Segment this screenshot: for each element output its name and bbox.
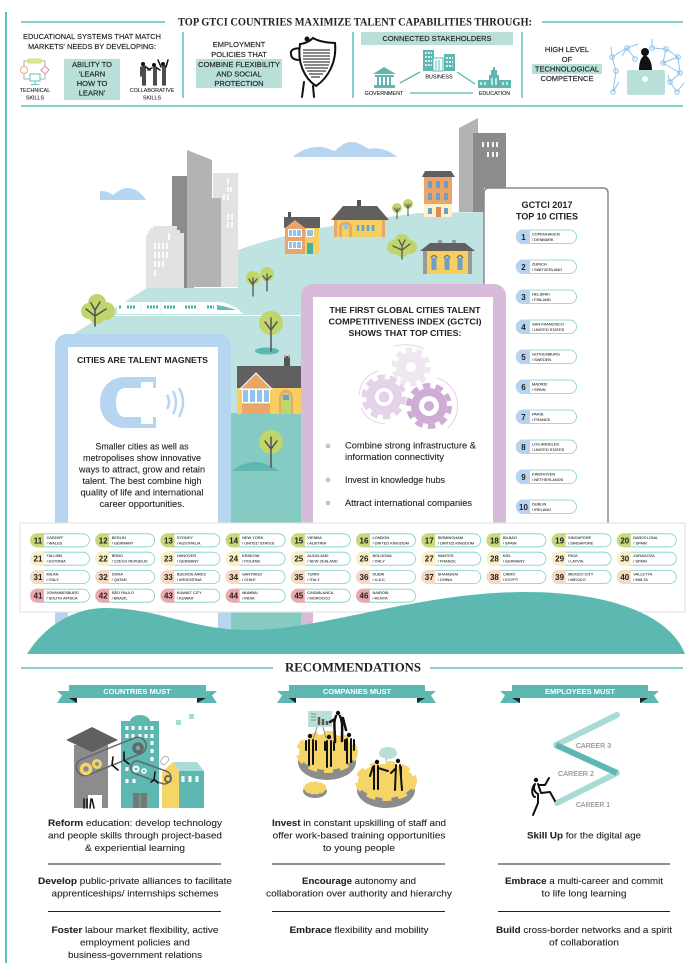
icon: business: BUSINESS [425, 74, 453, 80]
heading: educational systems: MARKETS' NEEDS BY DEVELOPING: [28, 42, 156, 51]
heading: GCTCI shows: SHOWS THAT TOP CITIES: [348, 328, 462, 338]
figures at door [84, 799, 94, 808]
pill: Copenhagen: COPENHAGEN [532, 232, 560, 236]
row: cities 31-40: 31 [34, 573, 43, 582]
row: cities 11-20: BERLIN [112, 535, 126, 540]
text column: companies [266, 818, 452, 936]
row: cities 31-40: / ARGENTINA [177, 577, 202, 582]
pill: Dublin [516, 500, 576, 514]
row: cities 41-46: JOHANNESBURG [46, 590, 79, 595]
box: ability to learn how to learn: 'LEARN [79, 70, 105, 78]
row: cities 31-40: VALLETTA [633, 572, 653, 576]
row: cities 31-40: TURIN [307, 572, 319, 576]
row: cities 31-40: 34 [229, 573, 239, 582]
panel: employment policies: EMPLOYMENT [213, 40, 266, 49]
row: cities 31-40: 32 [99, 573, 108, 582]
bullets list: Invest in knowledge hubs [345, 475, 445, 486]
tree: large upper [387, 234, 417, 259]
row: cities 21-30: / LATVIA [568, 559, 584, 564]
pill: San Francisco: / UNITED STATES [532, 327, 565, 332]
row: cities 31-40: 35 [294, 573, 304, 582]
row: cities 41-46: 44 [229, 592, 239, 601]
row: cities 21-30: NANTES [438, 553, 454, 558]
row: cities 21-30: BOLOGNA [372, 553, 392, 558]
text column: countries: & experiential learning [85, 843, 185, 854]
text column: countries: employment policies and [80, 938, 190, 948]
pill: Eindhoven [516, 470, 576, 484]
row: cities 11-20: 13 [164, 536, 173, 545]
pill: Los Angeles: 8 [521, 443, 526, 452]
row: cities 21-30: / GERMANY [177, 559, 199, 564]
icon: government [365, 67, 404, 97]
row: cities 31-40: DOHA [112, 572, 123, 576]
pill: Gothenburg: / SWEDEN [532, 357, 551, 362]
pill: Helsinki [516, 290, 576, 304]
text: talent magnets body: quality of life and international [80, 488, 204, 498]
label: career 1: CAREER 1 [576, 802, 610, 809]
row: cities 21-30: 30 [620, 555, 630, 564]
label: technical skills: TECHNICAL [20, 88, 50, 94]
illustration: companies [298, 711, 415, 808]
text column: employees: Build cross-border networks and a spirit [496, 925, 672, 936]
row: cities 11-20: / UNITED KINGDOM [372, 540, 409, 545]
figure: climbing person [532, 778, 555, 815]
people on gear [306, 711, 354, 767]
row: cities 21-30: 27 [425, 555, 434, 564]
cloud: top [293, 142, 397, 157]
row: cities 41-46: / MOROCCO [307, 596, 330, 601]
row: cities 31-40: MILAN [46, 572, 59, 576]
label: technical skills: SKILLS [26, 96, 45, 102]
row: cities 21-30: RIGA [568, 553, 578, 558]
train [117, 302, 243, 314]
pill: Gothenburg: 5 [521, 353, 526, 362]
pill: Helsinki: / FINLAND [532, 297, 551, 302]
speech bubble [379, 747, 397, 762]
text: talent magnets body: Smaller cities as well as [96, 442, 189, 452]
row: cities 11-20: 16 [360, 536, 369, 545]
pill: Helsinki: 3 [521, 293, 526, 302]
icon: collaborative people [141, 60, 168, 85]
icon: shield [291, 36, 335, 97]
row: cities 41-46: / KUWAIT [177, 596, 195, 601]
buildings: city cluster [146, 150, 238, 288]
label: career 3: CAREER 3 [576, 743, 611, 750]
row: cities 11-20: / SINGAPORE [568, 540, 594, 545]
presentation board [308, 711, 332, 740]
pill: San Francisco [516, 320, 576, 334]
panel: employment policies: COMBINE FLEXIBILITY [198, 60, 280, 69]
pill: Zurich [516, 260, 576, 274]
text column: countries: Reform education: develop technology [48, 818, 222, 829]
pill: Eindhoven: EINDHOVEN [532, 472, 555, 476]
pill: Los Angeles [516, 440, 576, 454]
conveyor belt lower [129, 755, 173, 786]
row: cities 11-20: 11 [34, 536, 43, 545]
row: cities 41-46: MUMBAI [242, 590, 258, 595]
pill: Copenhagen [516, 230, 576, 244]
label: career 2: CAREER 2 [558, 771, 594, 778]
pill: Dublin: 10 [519, 503, 528, 512]
banner: employees must [500, 685, 659, 703]
pill: Paris: / FRANCE [532, 417, 551, 422]
heading: top 10 cities [516, 200, 578, 222]
row: cities 11-20: 19 [555, 536, 565, 545]
row: cities 31-40: 40 [620, 573, 630, 582]
pill: San Francisco: SAN FRANCISCO [532, 322, 564, 326]
row: cities 21-30: TALLINN [46, 553, 62, 558]
text column: companies: offer work-based training opportunities [272, 830, 446, 842]
panel: technological competence: COMPETENCE [541, 74, 593, 83]
row: cities 11-20: / SPAIN [633, 540, 647, 545]
row: cities 11-20: LONDON [372, 535, 389, 540]
pill: Los Angeles: / UNITED STATES [532, 447, 565, 452]
panel: first global cities talent index [301, 284, 506, 634]
title: TOP GTCI COUNTRIES MAXIMIZE TALENT CAPABILITIES THROUGH: [178, 14, 532, 28]
row: cities 11-20: SYDNEY [177, 535, 193, 540]
box: ability to learn how to learn: LEARN' [79, 88, 106, 98]
pill: Paris [516, 410, 576, 424]
panel: top 10 cities [484, 188, 608, 530]
row: cities 11-20: / WALES [46, 540, 63, 545]
icon: government: GOVERNMENT [365, 91, 404, 97]
row: cities 21-30: / FRANCE [438, 559, 456, 564]
row: cities 11-20: 18 [490, 536, 499, 545]
row: cities 31-40: SANTIAGO [242, 572, 262, 576]
row: cities 41-46: CASABLANCA [307, 590, 334, 595]
row: cities 41-46: / SOUTH AFRICA [46, 596, 78, 601]
row: cities 11-20: BARCELONA [633, 535, 658, 540]
label: technical skills [20, 88, 50, 102]
label: collaborative skills: COLLABORATIVE [130, 88, 175, 94]
pill: Gothenburg: GOTHENBURG [532, 352, 560, 356]
row: cities 11-20 [30, 533, 676, 547]
panel: employment policies: POLICIES THAT [211, 50, 267, 59]
text column: companies: Invest in constant upskilling of staff and [272, 818, 446, 829]
pill: Gothenburg [516, 350, 576, 364]
pill: Eindhoven: / NETHERLANDS [532, 477, 564, 482]
row: cities 31-40: / MEXICO [568, 577, 586, 582]
heading: top 10 cities: TOP 10 CITIES [516, 212, 578, 222]
row: cities 21-30: 22 [99, 555, 108, 564]
heading: recommendations: RECOMMENDATIONS [285, 660, 421, 674]
icon: technical skills [20, 59, 49, 84]
row: cities 31-40: 38 [490, 573, 499, 582]
row: cities 31-40: / CHILE [242, 577, 256, 582]
tree: with mound [255, 311, 283, 354]
row: cities 31-40: SHANGHAI [438, 572, 458, 576]
gear platform large [298, 733, 356, 780]
pill: Zurich: / SWITZERLAND [532, 267, 562, 272]
row: cities 31-40: 36 [360, 573, 369, 582]
box: ability to learn how to learn [64, 59, 120, 100]
row: cities 11-20: BILBAO [503, 535, 517, 540]
text column: companies: to young people [323, 843, 395, 854]
row: cities 41-46: 42 [99, 592, 108, 601]
row: cities 21-30: KIEL [503, 553, 512, 558]
pill: Copenhagen: / DENMARK [532, 237, 554, 242]
row: cities 21-30: 29 [555, 555, 565, 564]
row: cities 21-30: 24 [229, 555, 239, 564]
row: cities 31-40: / CHINA [438, 577, 452, 582]
conveyor belt upper [74, 735, 149, 778]
panel: cities are talent magnets [55, 334, 231, 634]
row: cities 11-20: / UNITED STATES [242, 540, 275, 545]
row: cities 21-30 [30, 552, 676, 566]
text column: countries: Foster labour market flexibility, active [52, 925, 218, 936]
pill: Paris: 7 [521, 413, 526, 422]
row: cities 11-20: 15 [294, 536, 304, 545]
gear platform small [303, 782, 327, 798]
row: cities 31-40: 33 [164, 573, 173, 582]
panel: connected stakeholders [361, 32, 513, 97]
bullets list [326, 440, 477, 509]
row: cities 21-30: 28 [490, 555, 499, 564]
row: cities 11-20: CARDIFF [46, 535, 64, 540]
heading: GCTCI shows [328, 305, 482, 338]
text column: employees: to life long learning [542, 888, 626, 900]
row: cities 21-30: ZARAGOZA [633, 553, 655, 558]
icon: education: EDUCATION [479, 91, 510, 97]
row: cities 31-40: CAIRO [503, 572, 515, 576]
row: cities 41-46: KUWAIT CITY [177, 590, 202, 595]
building: top right tower [459, 118, 506, 212]
pill: Copenhagen: 1 [521, 233, 526, 242]
pill: Paris: PARIS [532, 412, 544, 416]
house: low yellow [420, 240, 475, 274]
heading: GCTCI shows: COMPETITIVENESS INDEX (GCTCI) [328, 316, 482, 326]
row: cities 31-40 [30, 570, 676, 584]
text column: countries: and people skills through project-based [48, 830, 222, 842]
gear platform right [357, 763, 415, 808]
cloud: left [100, 188, 146, 200]
row: cities 21-30: / SPAIN [633, 559, 647, 564]
row: cities 31-40: DUBAI [372, 572, 384, 576]
icon: technology network [610, 39, 684, 95]
house: cottage [237, 355, 301, 414]
row: cities 41-46: 46 [360, 592, 369, 601]
row: cities 11-20: NEW YORK [242, 535, 264, 540]
row: cities 41-46: 43 [164, 592, 173, 601]
row: cities 21-30: KRAKOW [242, 553, 260, 558]
house: tall townhouse [422, 171, 455, 217]
text column: countries: apprenticeships/ internships schemes [52, 888, 219, 900]
house: red gable [284, 212, 320, 254]
row: cities 21-30: / POLAND [242, 559, 260, 564]
row: cities 31-40: / EGYPT [503, 577, 519, 582]
text column: employees: Skill Up for the digital age [527, 830, 641, 842]
text column: employees: of collaboration [549, 938, 619, 948]
text column: employees: Embrace a multi-career and commit [505, 876, 663, 887]
row: cities 41-46: / BRAZIL [112, 596, 128, 601]
row: cities 21-30: / NEW ZEALAND [307, 559, 338, 564]
icon: education [478, 67, 511, 97]
heading: connected stakeholders: CONNECTED STAKEHOLDERS [382, 34, 492, 43]
pill: Madrid: / SPAIN [532, 387, 546, 392]
row: cities 11-20: / SPAIN [503, 540, 517, 545]
row: cities 31-40: / MALTA [633, 577, 648, 582]
text: talent magnets body [78, 442, 205, 510]
text column: countries: business-government relations [68, 950, 202, 961]
row: cities 21-30: AUCKLAND [307, 553, 329, 558]
panel: employment policies [196, 40, 282, 88]
row: cities 21-30: / GERMANY [503, 559, 525, 564]
row: cities 21-30: / CZECH REPUBLIC [112, 559, 148, 564]
people shaking hands [370, 759, 402, 790]
heading: talent magnets: CITIES ARE TALENT MAGNETS [77, 355, 208, 365]
cityscape [75, 118, 506, 640]
panel: employment policies: PROTECTION [214, 79, 264, 88]
text column: companies: Encourage autonomy and [302, 876, 416, 887]
row: cities 11-20: 17 [425, 536, 434, 545]
row: cities 11-20: / AUSTRIA [307, 540, 327, 545]
row: cities 21-30: / ITALY [372, 559, 385, 564]
row: cities 21-30: HANOVER [177, 553, 196, 558]
row: cities 31-40: MEXICO CITY [568, 572, 594, 576]
row: cities 11-20: / AUSTRALIA [177, 540, 201, 545]
tree: pair upper [392, 199, 413, 219]
pill: Dublin: / IRELAND [532, 507, 551, 512]
lower teal block [231, 413, 301, 638]
tree: large left [81, 294, 115, 326]
row: cities 31-40: 37 [425, 573, 434, 582]
heading: connected stakeholders [361, 32, 513, 45]
house: long yellow [331, 200, 389, 237]
panel: technological competence: TECHNOLOGICAL [535, 64, 599, 74]
pill: Zurich: ZURICH [532, 262, 547, 266]
pill: San Francisco: 4 [521, 323, 526, 332]
row: cities 31-40: BUENOS AIRES [177, 572, 206, 576]
row: cities 11-20: SINGAPORE [568, 535, 592, 540]
bullets list: Attract international companies [345, 498, 472, 509]
row: cities 11-20: VIENNA [307, 535, 322, 540]
lower hill [27, 592, 685, 654]
row: cities 41-46: 45 [294, 592, 304, 601]
row: cities 11-20: 20 [620, 536, 630, 545]
box: ability to learn how to learn: HOW TO [77, 79, 107, 88]
tree: lower with mound [232, 430, 283, 471]
row: cities 41-46: / INDIA [242, 596, 255, 601]
row: cities 31-40: 39 [555, 573, 565, 582]
pill: Los Angeles: LOS ANGELES [532, 442, 559, 446]
row: cities 41-46: 41 [34, 592, 43, 601]
heading: educational systems: EDUCATIONAL SYSTEMS THAT MATCH [23, 32, 161, 41]
row: cities 31-40: / ITALY [307, 577, 320, 582]
heading: top 10 cities: GCTCI 2017 [522, 200, 572, 210]
bullets list: Combine strong infrastructure & [345, 440, 477, 452]
row: cities 31-40: / U.A.E. [372, 577, 386, 582]
label: collaborative skills: SKILLS [143, 96, 162, 102]
text column: employees [496, 830, 672, 948]
text column: countries: Develop public-private alliances to facilitate [38, 876, 232, 887]
pill: Eindhoven: 9 [521, 473, 526, 482]
row: cities 41-46: / KENYA [372, 596, 388, 601]
row: cities 11-20: / UNITED KINGDOM [438, 540, 474, 545]
row: cities 21-30: 26 [360, 555, 369, 564]
text: talent magnets body: career opportunities. [100, 499, 184, 510]
panel: technological competence: HIGH LEVEL [545, 45, 589, 54]
row: cities 41-46 [30, 589, 416, 603]
icon: business [423, 50, 455, 80]
banner: countries must [57, 685, 217, 703]
text: talent magnets body: ways to attract, grow and retain [78, 464, 205, 476]
tree: pair center [246, 267, 274, 296]
banner: countries must: COUNTRIES MUST [103, 687, 171, 696]
illustration: countries [66, 714, 204, 808]
panel: cities 11 to 46 [20, 523, 685, 612]
text: talent magnets body: talent. The best combine high [82, 476, 202, 487]
row: cities 31-40: / ITALY [46, 577, 59, 582]
row: cities 11-20: 14 [229, 536, 239, 545]
illustration: career zigzag [532, 715, 617, 815]
icon: gears [359, 345, 458, 428]
panel: educational systems [20, 32, 175, 102]
panel: employment policies: AND SOCIAL [216, 70, 262, 78]
pill: Madrid: MADRID [532, 382, 548, 386]
banner: employees must: EMPLOYEES MUST [545, 687, 615, 696]
text column: companies: Embrace flexibility and mobility [290, 925, 429, 936]
pill: Madrid: 6 [521, 383, 526, 392]
row: cities 21-30: / ESTONIA [46, 559, 66, 564]
row: cities 11-20: 12 [99, 536, 108, 545]
row: cities 31-40: / QATAR [112, 577, 127, 582]
hill [75, 212, 484, 640]
text: talent magnets body: metropolises show innovative [83, 453, 201, 464]
box: ability to learn how to learn: ABILITY TO [72, 60, 112, 69]
row: cities 21-30: BRNO [112, 553, 123, 558]
panel: technological competence: OF [562, 55, 573, 64]
connectors [400, 72, 475, 93]
text column: companies: collaboration over authority and hierarchy [266, 888, 452, 900]
text column: countries [38, 818, 232, 961]
label: collaborative skills [130, 88, 175, 102]
pill: Dublin: DUBLIN [532, 502, 546, 506]
bullets list: information connectivity [345, 452, 444, 463]
row: cities 21-30: 25 [294, 555, 304, 564]
heading: GCTCI shows: THE FIRST GLOBAL CITIES TALENT [330, 305, 481, 315]
heading: educational systems [23, 32, 161, 51]
icon: magnet [100, 377, 183, 428]
banner: companies must: COMPANIES MUST [323, 687, 392, 696]
row: cities 21-30: 21 [34, 555, 43, 564]
row: cities 21-30: 23 [164, 555, 173, 564]
pill: Helsinki: HELSINKI [532, 292, 550, 296]
row: cities 41-46: NAIROBI [372, 590, 388, 595]
row: cities 41-46: SÃO PAULO [112, 590, 134, 595]
row: cities 11-20: BIRMINGHAM [438, 535, 463, 540]
row: cities 11-20: / GERMANY [112, 540, 134, 545]
pill: Madrid [516, 380, 576, 394]
pill: Zurich: 2 [521, 263, 526, 272]
banner: companies must [277, 685, 436, 703]
panel: technological competence [532, 45, 602, 83]
